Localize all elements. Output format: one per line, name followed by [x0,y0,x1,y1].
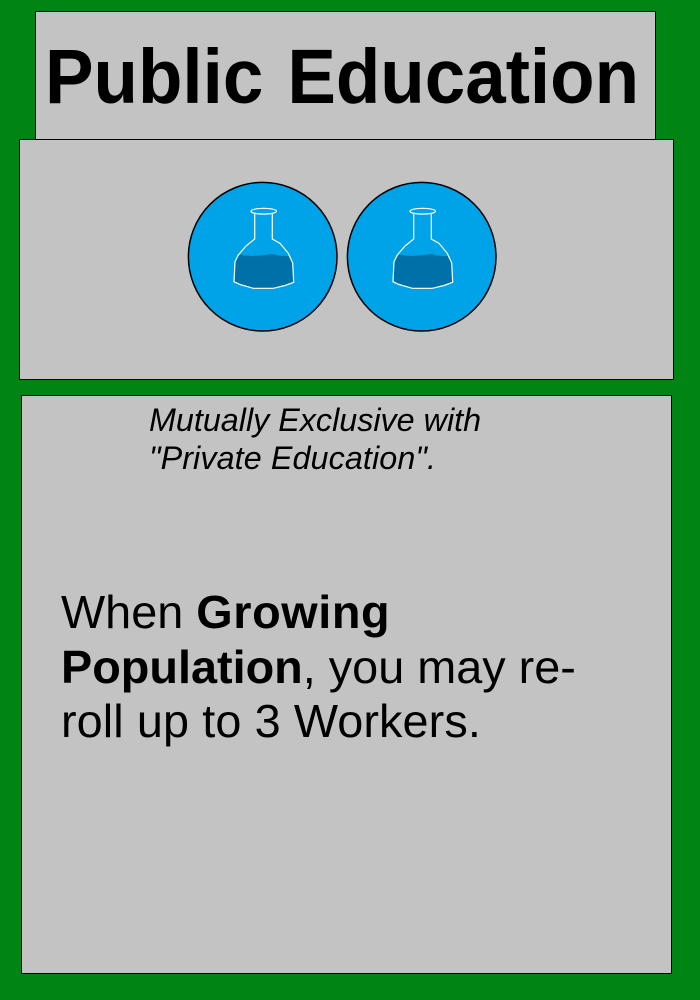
icons: science flasks [188,182,497,332]
effect text: Population, you may re- [61,640,576,692]
heading: Public Education: Public Education [45,34,639,120]
note: mutually exclusive [149,402,481,476]
effect text: roll up to 3 Workers. [61,695,481,747]
panel: title [35,11,656,140]
icon: flask 1 [188,182,337,331]
effect text: When Growing [61,586,390,638]
icon: flask 2 [347,182,496,331]
note: mutually exclusive: "Private Education". [149,440,436,476]
panel: cost icons [19,139,674,380]
note: mutually exclusive: Mutually Exclusive with [149,402,481,438]
effect text [61,586,576,747]
panel: card text [21,395,672,974]
